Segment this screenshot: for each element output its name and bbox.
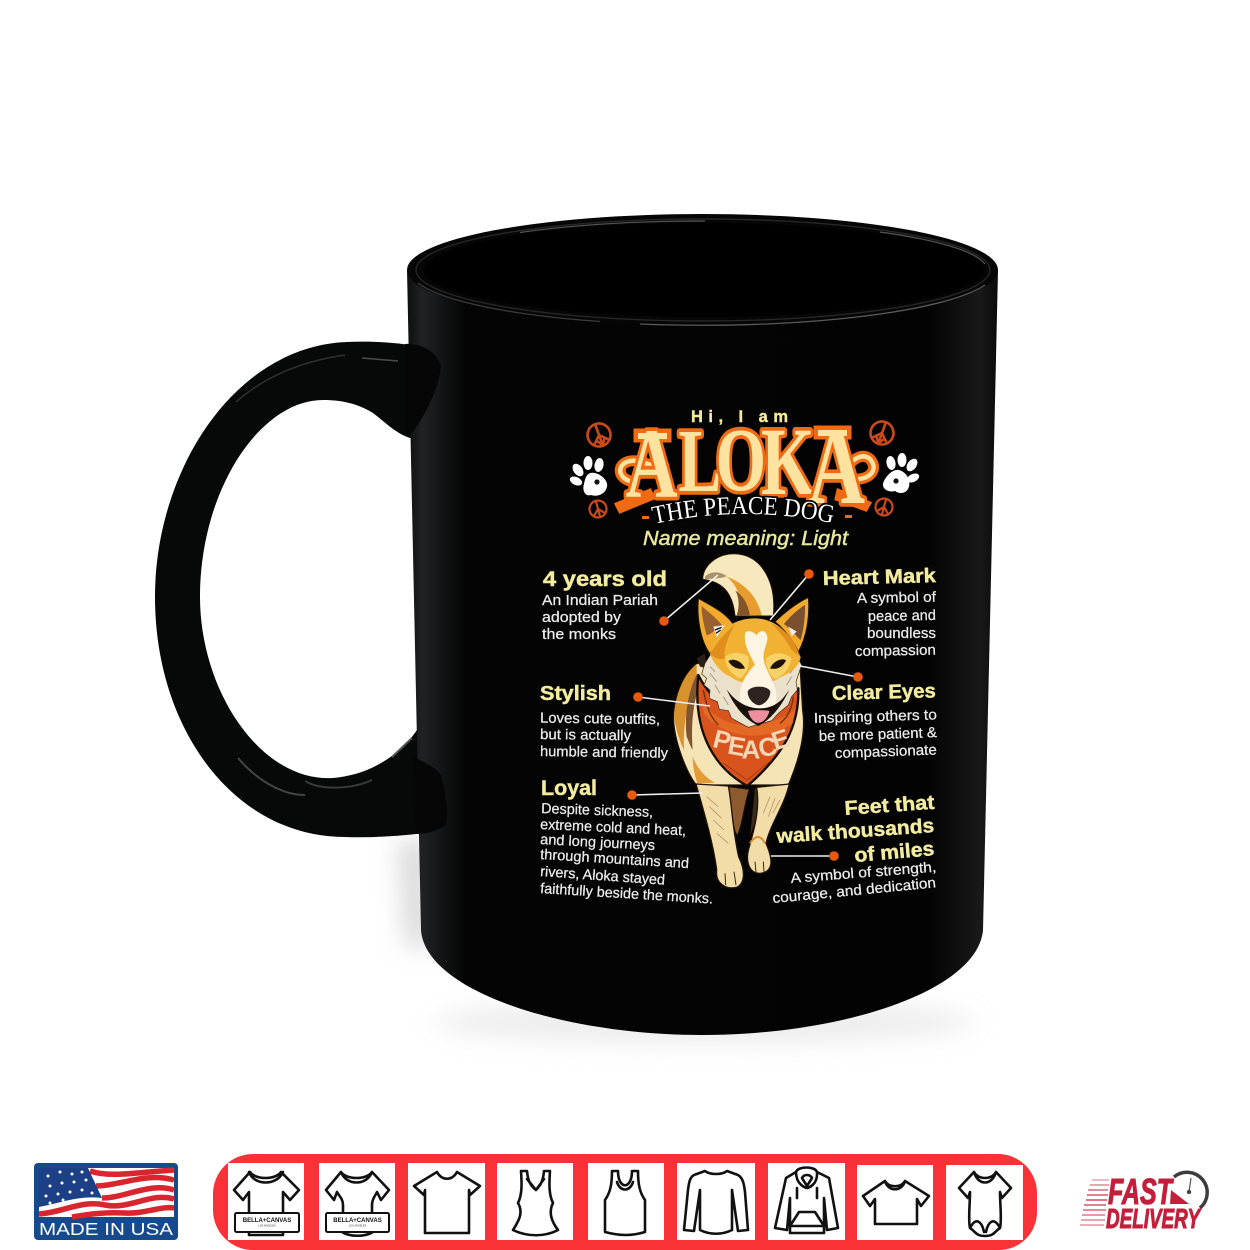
callout: Stylish: Loves cute outfits,	[540, 711, 660, 728]
dog hind leg right	[750, 788, 763, 837]
mug rim	[407, 214, 998, 326]
greeting text: Hi, I am	[691, 408, 788, 426]
callout: 4 years old: 4 years old	[543, 568, 667, 591]
callout: Loyal: Loyal	[541, 777, 597, 800]
gauge icon	[1170, 1172, 1207, 1208]
fast delivery badge	[1080, 1171, 1207, 1234]
mug handle	[155, 342, 425, 837]
callout: Loyal: extreme cold and heat,	[540, 817, 686, 839]
callout: Loyal: Despite sickness,	[541, 801, 653, 821]
dog mouth	[727, 689, 789, 726]
callout: Stylish: Stylish	[540, 683, 611, 705]
callout: Clear Eyes: compassionate	[835, 742, 937, 762]
printed heading	[570, 405, 920, 550]
delivery text: DELIVERY	[1106, 1203, 1202, 1234]
icon: right paw	[883, 453, 921, 493]
callout: Loyal: faithfully beside the monks.	[540, 881, 713, 908]
badge text: MADE IN USA	[39, 1219, 173, 1239]
callout: Feet: Feet that	[844, 792, 935, 820]
dog ruff	[702, 650, 802, 727]
callout: Loyal	[540, 777, 713, 908]
dog left front leg	[696, 784, 743, 888]
tile: hoodie	[768, 1163, 845, 1240]
mug handle joints	[405, 344, 447, 834]
callout: Heart Mark: Heart Mark	[823, 565, 937, 590]
tile: tee with tag: BELLA+CANVAS	[243, 1218, 291, 1224]
callout: 4 years old: adopted by	[542, 610, 622, 626]
bandana: PEACE	[710, 722, 793, 764]
ALOKA title: L	[678, 411, 721, 511]
callout: 4 years old	[542, 568, 718, 643]
tile: fitted tee with tag	[319, 1163, 395, 1240]
ALOKA title: K	[761, 409, 815, 516]
dog collar	[697, 653, 707, 668]
callout: Loyal: and long journeys	[540, 832, 655, 854]
ALOKA title	[616, 405, 874, 527]
icon: left paw	[568, 456, 607, 496]
callout: Feet	[771, 792, 937, 907]
callout: Heart Mark: boundless	[867, 626, 936, 642]
tile: tee with tag: LOS ANGELES	[258, 1224, 276, 1228]
dog eyes	[728, 659, 786, 669]
tile: racerback tank	[497, 1163, 573, 1240]
icon: peace sign top left	[584, 420, 614, 450]
fast text: FAST	[1108, 1171, 1174, 1212]
callout: Stylish: but is actually	[540, 727, 632, 744]
head shading	[710, 624, 800, 679]
icon: peace sign bottom left	[588, 499, 608, 519]
speed lines	[1080, 1179, 1109, 1226]
ALOKA title: A	[626, 407, 678, 519]
dog ears	[698, 597, 809, 654]
callout: Stylish	[540, 683, 710, 762]
mug drop shadow	[398, 840, 975, 1044]
dog nose	[748, 687, 770, 705]
tile: tee with tag	[228, 1163, 304, 1240]
icon: peace sign top right	[867, 418, 897, 448]
dog paws	[725, 862, 764, 885]
callout: Stylish: humble and friendly	[540, 744, 669, 762]
tile: onesie	[946, 1165, 1023, 1240]
product type strip	[213, 1154, 1037, 1250]
dog back shading	[674, 664, 715, 783]
dog illustration	[673, 554, 809, 888]
mug	[155, 214, 998, 1035]
tile: fitted tee with tag: BELLA+CANVAS	[333, 1218, 382, 1224]
subtitle: THE PEACE DOG	[651, 494, 834, 524]
callout: Feet: of miles	[854, 838, 935, 867]
tile: crop tee	[857, 1165, 933, 1240]
ALOKA title: O	[716, 410, 766, 510]
callout: Loyal: through mountains and	[540, 847, 689, 872]
ALOKA title: A	[808, 405, 865, 527]
callout: 4 years old: the monks	[542, 627, 616, 643]
bandana	[697, 675, 798, 786]
callout: Clear Eyes: be more patient &	[819, 725, 937, 745]
dog tail	[703, 554, 774, 616]
icon: peace sign bottom right	[874, 497, 894, 517]
strip background	[213, 1154, 1037, 1250]
callouts	[540, 565, 937, 908]
callout: Heart Mark	[770, 565, 937, 660]
dog head	[710, 618, 801, 684]
tile: tank top	[588, 1163, 664, 1240]
callout: Clear Eyes: Inspiring others to	[814, 707, 937, 727]
callout: Heart Mark: peace and	[868, 608, 936, 625]
dog body	[673, 663, 804, 785]
dog back leg	[728, 787, 749, 835]
callout: Heart Mark: compassion	[855, 643, 936, 660]
tile: t-shirt	[408, 1163, 485, 1240]
callout: 4 years old: An Indian Pariah	[542, 593, 658, 609]
callout: Feet: A symbol of strength,	[790, 860, 937, 887]
callout: Feet: walk thousands	[775, 815, 935, 848]
callout: Heart Mark: A symbol of	[857, 590, 937, 607]
tile: fitted tee with tag: LOS ANGELES	[349, 1224, 367, 1228]
callout: Clear Eyes: Clear Eyes	[832, 680, 936, 705]
mug body	[407, 270, 998, 1035]
dog right front leg	[748, 784, 789, 873]
callout: Feet: courage, and dedication	[772, 875, 937, 907]
made in USA badge	[34, 1163, 178, 1240]
tile: long sleeve	[677, 1163, 755, 1240]
name meaning: Name meaning: Light	[643, 528, 850, 550]
callout: Clear Eyes	[800, 666, 937, 762]
dog face blaze	[740, 631, 776, 710]
callout: Loyal: rivers, Aloka stayed	[540, 864, 666, 889]
leg fur shading	[707, 797, 780, 843]
